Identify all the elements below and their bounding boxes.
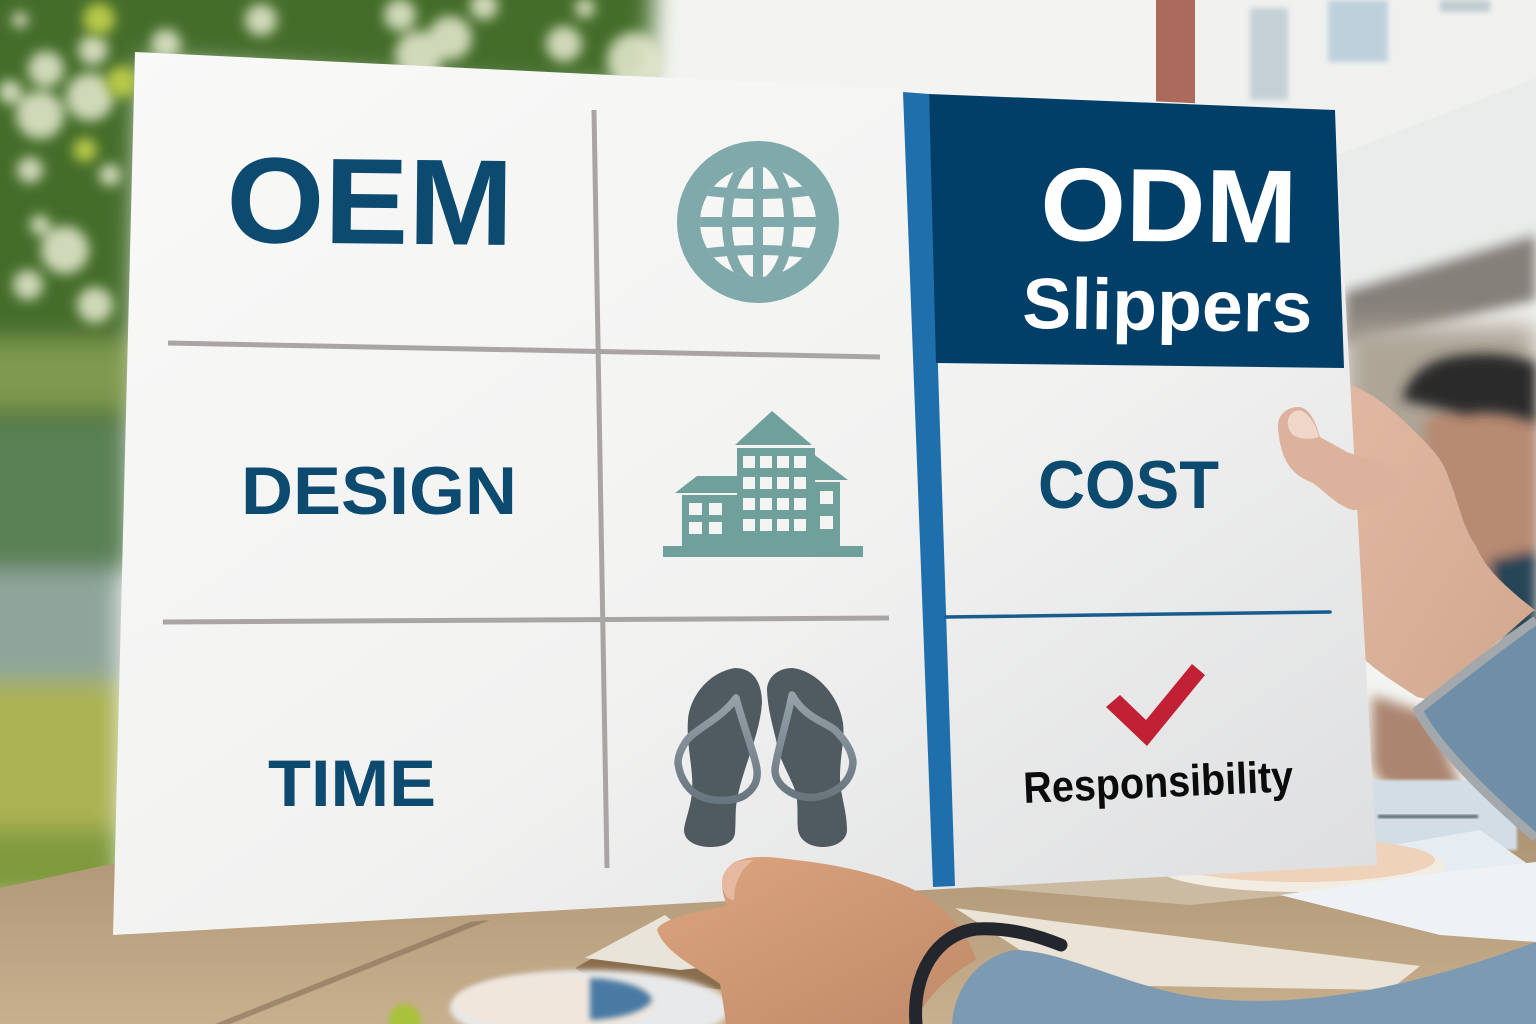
building: brick column, walls and windows — [1156, 0, 1536, 635]
sleeve: bottom denim sleeve — [952, 942, 1536, 1024]
heading: ODM: ODM — [1040, 147, 1298, 266]
table — [0, 820, 1536, 1024]
panel: ODM Slippers header — [929, 94, 1344, 368]
bracelet — [916, 929, 1061, 1024]
hand: right thumb over board — [1278, 407, 1405, 510]
blue separator — [946, 612, 1330, 617]
label: DESIGN: DESIGN — [241, 453, 517, 529]
hand: bottom hand holding board — [657, 857, 976, 1024]
icon: building — [663, 411, 863, 557]
label: TIME: TIME — [268, 746, 436, 820]
hand: back of right hand behind board — [1342, 383, 1536, 701]
label: Responsibility: Responsibility — [1022, 752, 1295, 813]
heading: OEM: OEM — [226, 132, 514, 271]
blue divider strip — [903, 92, 955, 887]
sleeve: right denim cuff — [1418, 620, 1536, 838]
label: COST: COST — [1038, 447, 1219, 523]
heading: Slippers: Slippers — [1022, 264, 1313, 348]
tree foliage and garden — [0, 0, 663, 900]
background person — [1402, 354, 1536, 635]
table items: plank shadow, papers, plate, notebook, coaster — [215, 695, 1536, 1024]
icon: flip-flops — [678, 668, 853, 847]
icon: globe — [677, 141, 839, 303]
sign board — [113, 52, 1377, 935]
icon: red check mark — [1106, 664, 1205, 746]
grid lines — [163, 110, 889, 868]
